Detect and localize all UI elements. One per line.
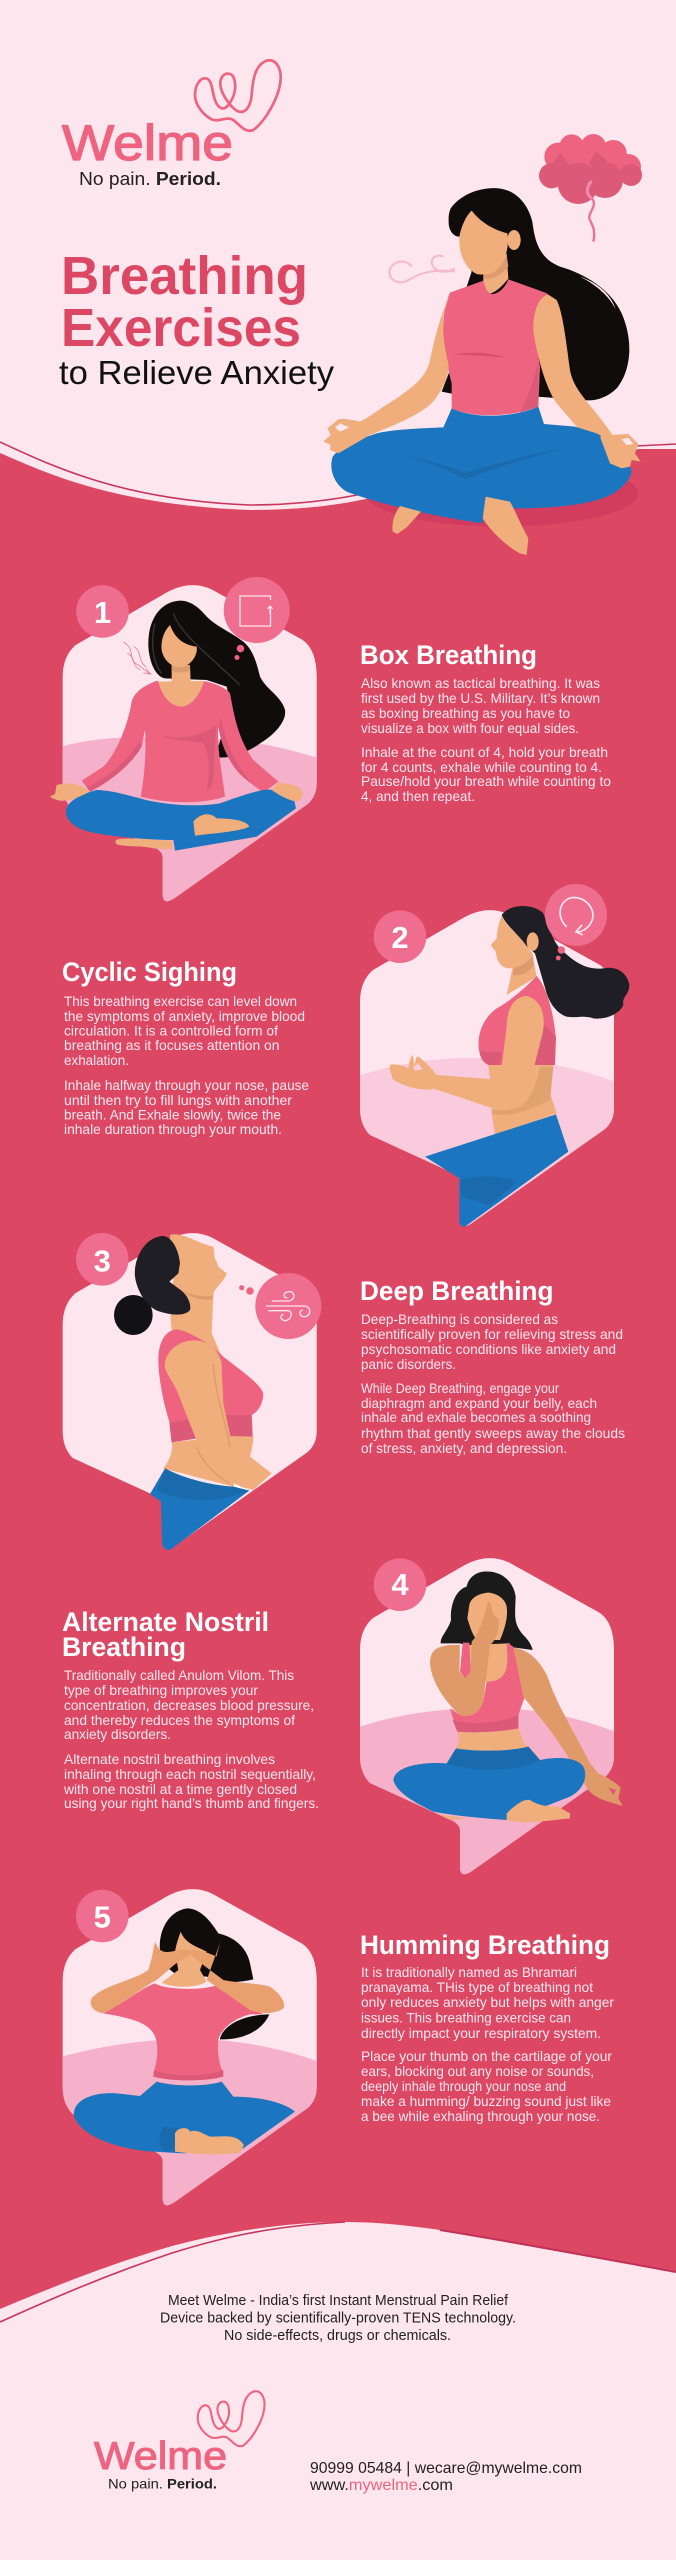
text: Deep Breathing: diaphragm and expand your belly, each <box>361 1396 597 1411</box>
footer description <box>160 2292 516 2344</box>
logo wordmark: Welme <box>62 115 233 171</box>
footer logo squiggle <box>198 2391 265 2446</box>
number badge 1 <box>76 585 129 638</box>
hexagon badge <box>360 910 614 1226</box>
figure: woman with head tilted back <box>114 1234 272 1550</box>
text: Alternate Nostril Breathing: using your right hand’s thumb and fingers. <box>64 1796 319 1811</box>
text: Deep Breathing: scientifically proven for relieving stress and <box>361 1327 623 1342</box>
icon: wind <box>255 1273 321 1339</box>
text: Box Breathing: Inhale at the count of 4, hold your breath <box>361 745 608 760</box>
text: Humming Breathing: deeply inhale through your nose and <box>361 2079 566 2094</box>
text: Cyclic Sighing: This breathing exercise can level down <box>64 994 297 1009</box>
breath swirl <box>389 256 455 282</box>
number badge 4 <box>374 1558 426 1611</box>
text: Deep Breathing: While Deep Breathing, engage your <box>361 1381 559 1396</box>
text: Humming Breathing: pranayama. THis type of breathing not <box>361 1980 593 1995</box>
text: Deep Breathing: Deep Breathing <box>360 1276 554 1306</box>
footer description: No side-effects, drugs or chemicals. <box>224 2327 451 2344</box>
panel 3: Deep Breathing illustration <box>63 1233 321 1550</box>
text: Humming Breathing: directly impact your respiratory system. <box>361 2026 601 2041</box>
icon: cyclic arrow <box>545 884 607 946</box>
text: Cyclic Sighing: circulation. It is a controlled form of <box>64 1024 278 1038</box>
text: Box Breathing: 4, and then repeat. <box>361 789 475 804</box>
text: Humming Breathing: Place your thumb on the cartilage of your <box>361 2049 612 2064</box>
number badge 3 <box>76 1233 129 1286</box>
text: Alternate Nostril Breathing: Alternate nostril breathing involves <box>64 1752 275 1767</box>
footer description: Meet Welme - India’s first Instant Menstrual Pain Relief <box>168 2292 509 2309</box>
number 5: 5 <box>94 1900 111 1934</box>
figure: woman closing one nostril <box>393 1571 623 1822</box>
breath arrows <box>123 642 151 674</box>
text: Deep Breathing: inhale and exhale becomes a soothing <box>361 1410 591 1425</box>
logo: Welme header <box>62 60 281 189</box>
text: Cyclic Sighing: Inhale halfway through your nose, pause <box>64 1078 309 1093</box>
text: Box Breathing <box>360 640 611 804</box>
title: Exercises <box>61 298 301 358</box>
figure: woman covering eyes and ears <box>74 1908 295 2154</box>
number badge 5 <box>76 1890 129 1942</box>
title: Breathing <box>61 246 308 306</box>
thought dots <box>556 946 565 960</box>
text: Humming Breathing: a bee while exhaling through your nose. <box>361 2109 600 2124</box>
text: Alternate Nostril Breathing: Traditionally called Anulom Vilom. This <box>64 1668 294 1683</box>
text: Cyclic Sighing: Cyclic Sighing <box>62 957 237 987</box>
text: Alternate Nostril Breathing <box>62 1607 319 1811</box>
footer description: Device backed by scientifically-proven TENS technology. <box>160 2310 516 2326</box>
text: Cyclic Sighing: breath. And Exhale slowly, twice the <box>64 1108 281 1122</box>
panel 5: Humming Breathing illustration <box>62 1889 317 2206</box>
text: Deep Breathing <box>360 1276 625 1456</box>
text: Alternate Nostril Breathing: with one nostril at a time gently closed <box>63 1782 297 1797</box>
text: Alternate Nostril Breathing: type of breathing improves your <box>64 1683 258 1698</box>
crimson main panel with curved edges <box>0 442 676 2322</box>
text: Cyclic Sighing: the symptoms of anxiety, improve blood <box>64 1009 305 1024</box>
hexagon badge <box>63 1233 317 1549</box>
text: Alternate Nostril Breathing: inhaling through each nostril sequentially, <box>64 1767 316 1782</box>
text: Humming Breathing: It is traditionally named as Bhramari <box>361 1965 577 1980</box>
hero figure: meditating woman <box>323 188 641 555</box>
thought dots <box>239 1285 254 1295</box>
text: Alternate Nostril Breathing: Alternate Nostril <box>62 1607 269 1637</box>
text: Cyclic Sighing: breathing as it focuses attention on <box>64 1038 280 1053</box>
number 1: 1 <box>94 595 111 630</box>
footer logo tagline: No pain. Period. <box>108 2476 217 2492</box>
text: Humming Breathing <box>360 1930 614 2124</box>
contact details: www.mywelme.com <box>309 2477 453 2494</box>
text: Box Breathing: first used by the U.S. Military. It’s known <box>361 691 600 706</box>
text: Box Breathing: Also known as tactical breathing. It was <box>361 676 600 691</box>
text: Humming Breathing: Humming Breathing <box>360 1930 610 1960</box>
number 3: 3 <box>94 1244 111 1278</box>
footer logo wordmark: Welme <box>94 2435 227 2478</box>
hexagon badge <box>63 585 317 901</box>
text: Alternate Nostril Breathing: and thereby reduces the symptoms of <box>64 1713 295 1728</box>
text: Cyclic Sighing: until then try to fill lungs with another <box>64 1093 292 1108</box>
title <box>59 246 335 391</box>
number 4: 4 <box>391 1567 409 1602</box>
text: Cyclic Sighing <box>62 957 309 1137</box>
thought dots <box>234 645 244 660</box>
text: Cyclic Sighing: inhale duration through your mouth. <box>64 1122 282 1137</box>
panel 1: Box Breathing illustration <box>50 577 317 902</box>
logo: Welme footer <box>94 2391 265 2492</box>
figure: seated woman in long sleeves <box>50 601 303 851</box>
hexagon badge <box>63 1889 317 2205</box>
figure: woman in profile <box>390 906 629 1227</box>
number badge 2 <box>374 910 426 963</box>
panel 4: Alternate Nostril illustration <box>360 1558 622 1874</box>
logo tagline: No pain. Period. <box>79 169 221 189</box>
text: Humming Breathing: issues. This breathing exercise can <box>361 2010 571 2026</box>
logo squiggle mark <box>195 60 281 131</box>
text: Deep Breathing: of stress, anxiety, and depression. <box>361 1441 567 1456</box>
text: Deep Breathing: panic disorders. <box>361 1357 456 1372</box>
text: Box Breathing: visualize a box with four equal sides. <box>361 721 579 736</box>
contact details <box>309 2460 582 2494</box>
text: Deep Breathing: Deep-Breathing is considered as <box>361 1312 558 1327</box>
title: to Relieve Anxiety <box>59 354 335 391</box>
icon: anxious cloud <box>539 134 642 242</box>
text: Humming Breathing: only reduces anxiety but helps with anger <box>361 1995 614 2010</box>
text: Humming Breathing: ears, blocking out any noise or sounds, <box>361 2064 594 2079</box>
text: Cyclic Sighing: exhalation. <box>64 1053 129 1068</box>
icon: box breathing <box>224 577 290 643</box>
panel 2: Cyclic Sighing illustration <box>360 884 630 1227</box>
text: Alternate Nostril Breathing: Breathing <box>62 1632 186 1662</box>
contact details: 90999 05484 | wecare@mywelme.com <box>310 2460 582 2477</box>
text: Alternate Nostril Breathing: concentration, decreases blood pressure, <box>64 1698 314 1713</box>
text: Box Breathing: for 4 counts, exhale while counting to 4. <box>361 760 602 775</box>
text: Box Breathing: Pause/hold your breath while counting to <box>361 774 611 789</box>
text: Deep Breathing: psychosomatic conditions like anxiety and <box>361 1342 616 1357</box>
number 2: 2 <box>391 920 409 955</box>
hexagon badge <box>360 1558 614 1874</box>
text: Box Breathing: as boxing breathing as you have to <box>361 706 570 721</box>
text: Humming Breathing: make a humming/ buzzing sound just like <box>361 2094 611 2109</box>
text: Alternate Nostril Breathing: anxiety disorders. <box>64 1727 171 1742</box>
text: Deep Breathing: rhythm that gently sweeps away the clouds <box>361 1426 625 1441</box>
text: Box Breathing: Box Breathing <box>360 640 537 670</box>
